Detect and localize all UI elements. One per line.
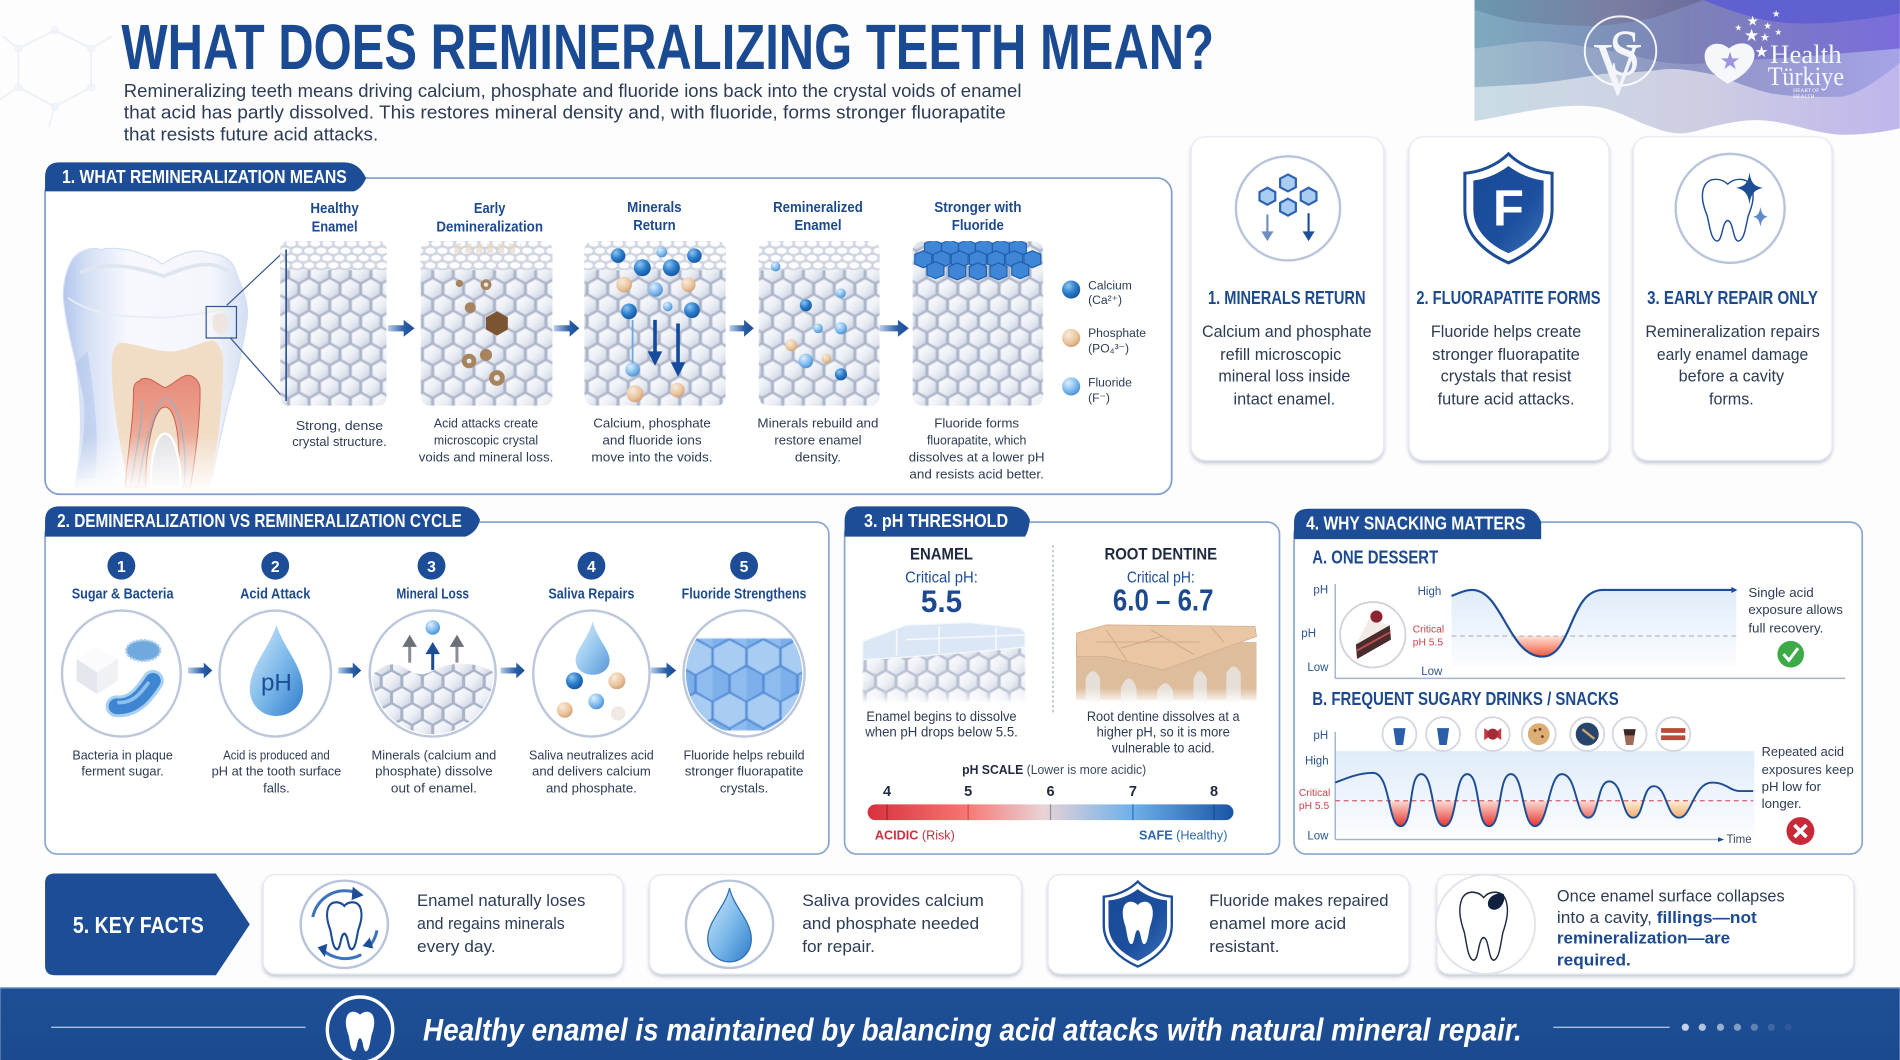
caption xyxy=(529,748,654,795)
caption xyxy=(212,748,341,795)
icon: crystals dissolving xyxy=(370,611,496,739)
logo: SV: S xyxy=(1609,18,1641,90)
step: remineralized enamel xyxy=(757,200,880,465)
text: Saliva provides calcium xyxy=(802,891,984,910)
heading: Return xyxy=(633,218,676,234)
chart B: frequent snacks: Low xyxy=(1307,831,1329,843)
step 4: saliva repairs xyxy=(529,552,654,795)
chart A: one dessert: pH 5.5 xyxy=(1413,638,1443,649)
caption: pH at the tooth surface xyxy=(212,763,341,778)
chart A: one dessert xyxy=(1302,584,1846,680)
caption: Minerals (calcium and xyxy=(372,748,496,763)
icon: tooth badge xyxy=(327,997,393,1060)
logo: Health Türkiye xyxy=(1705,9,1844,100)
icon: fluoride shield: F xyxy=(1493,179,1524,236)
legend: ions: Phosphate xyxy=(1088,326,1146,340)
caption: Saliva neutralizes acid xyxy=(529,748,654,763)
tab heading 4: 4. WHY SNACKING MATTERS xyxy=(1306,513,1525,533)
chart B: frequent snacks: pH xyxy=(1313,730,1328,742)
caption: Fluoride forms xyxy=(934,416,1019,431)
column: enamel xyxy=(863,545,1025,740)
intro paragraph: that acid has partly dissolved. This restores mineral density and, with fluoride, forms stronger fluorapatite xyxy=(124,103,1006,123)
pH scale: SAFE (Healthy) xyxy=(1139,828,1227,843)
logo: Health Türkiye: Health xyxy=(1770,39,1842,69)
heading xyxy=(310,201,359,235)
key facts banner xyxy=(45,873,250,975)
column: root dentine: higher pH, so it is more xyxy=(1097,724,1230,740)
tab heading 1 xyxy=(45,162,366,191)
body: refill microscopic xyxy=(1220,345,1342,364)
legend: ions: Calcium xyxy=(1088,279,1132,293)
chart A: one dessert: Critical xyxy=(1413,624,1444,635)
chart B: frequent snacks: High xyxy=(1305,755,1329,767)
icons: sugary snacks xyxy=(1382,717,1690,751)
text: enamel more acid xyxy=(1209,914,1346,933)
crystal block with ions xyxy=(584,241,726,406)
column: enamel: ENAMEL xyxy=(910,545,973,564)
logo: SV xyxy=(1585,16,1656,111)
column: root dentine: Critical pH: xyxy=(1127,570,1195,587)
arrow xyxy=(651,663,676,678)
pH scale: pH SCALE (Lower is more acidic) xyxy=(962,762,1146,777)
fact card 1 xyxy=(263,875,623,974)
logo: Health Türkiye: ★ xyxy=(1763,21,1772,32)
step 2: acid attack: 2 xyxy=(271,559,280,576)
card: minerals return xyxy=(1191,137,1384,460)
note: longer. xyxy=(1762,796,1802,811)
caption: out of enamel. xyxy=(391,780,477,795)
caption: and delivers calcium xyxy=(532,763,651,778)
caption: Acid is produced and xyxy=(223,748,330,763)
card: fluorapatite forms xyxy=(1409,137,1609,460)
icon: pH drop xyxy=(220,611,331,737)
body: mineral loss inside xyxy=(1218,367,1350,386)
heading xyxy=(773,200,863,234)
heading: Stronger with xyxy=(934,200,1021,216)
pH scale: ACIDIC (Risk) xyxy=(875,828,955,843)
arrow xyxy=(338,663,361,678)
legend: ions: (PO₄³⁻) xyxy=(1088,342,1129,356)
caption xyxy=(909,416,1044,482)
icon: check xyxy=(1777,641,1804,667)
chart A: one dessert: High xyxy=(1418,586,1441,598)
step 1: sugar and bacteria xyxy=(62,552,181,778)
arrow xyxy=(188,663,212,678)
step 5: fluoride strengthens xyxy=(682,552,806,795)
body: future acid attacks. xyxy=(1438,390,1574,409)
tooth cross-section illustration xyxy=(61,248,255,493)
heading: Enamel xyxy=(312,219,358,235)
chart A: one dessert: Low xyxy=(1307,662,1329,674)
caption: Bacteria in plaque xyxy=(72,748,173,763)
caption xyxy=(419,416,553,465)
caption: and resists acid better. xyxy=(909,467,1044,482)
title: WHAT DOES REMINERALIZING TEETH MEAN? xyxy=(121,11,1214,83)
logo: Health Türkiye: ★ xyxy=(1774,27,1782,37)
text: required. xyxy=(1557,951,1631,970)
icon: blue crystals xyxy=(683,611,805,737)
crystal block rebuilt xyxy=(759,241,880,406)
body: stronger fluorapatite xyxy=(1432,345,1580,364)
text: and phosphate needed xyxy=(802,914,979,933)
pH scale: 7 xyxy=(1129,784,1137,800)
intro paragraph xyxy=(124,81,1021,145)
chart A: one dessert: pH xyxy=(1301,628,1316,640)
caption: microscopic crystal xyxy=(434,433,538,448)
fact card 3 xyxy=(1048,875,1409,974)
note: pH low for xyxy=(1762,779,1822,794)
caption: restore enamel xyxy=(774,433,862,448)
step 3: mineral loss: Mineral Loss xyxy=(396,586,469,602)
heading: Enamel xyxy=(794,218,842,234)
caption xyxy=(591,416,713,465)
body: Fluoride helps create xyxy=(1431,322,1581,341)
tab heading 1: 1. WHAT REMINERALIZATION MEANS xyxy=(62,167,347,187)
pH scale: 6 xyxy=(1047,784,1055,800)
caption: and phosphate. xyxy=(546,780,637,795)
step: minerals return xyxy=(584,200,726,465)
header corner with logos xyxy=(1475,0,1900,135)
caption: voids and mineral loss. xyxy=(419,450,553,465)
body: early enamel damage xyxy=(1657,345,1808,364)
caption: crystal structure. xyxy=(292,434,387,449)
step 4: saliva repairs: 4 xyxy=(587,559,596,576)
chart A: one dessert: Low xyxy=(1421,666,1443,678)
heading: Early xyxy=(474,201,505,217)
text xyxy=(1557,886,1785,970)
caption xyxy=(292,418,387,449)
divider xyxy=(1052,545,1054,715)
tab heading 2 xyxy=(45,506,480,537)
fact card 2 xyxy=(650,875,1021,974)
tab heading 3: 3. pH THRESHOLD xyxy=(864,511,1008,531)
text xyxy=(1209,891,1389,956)
logo: Health Türkiye: HEALTH xyxy=(1793,94,1814,100)
legend: ions: Fluoride xyxy=(1088,375,1132,389)
logo: Health Türkiye: Türkiye xyxy=(1768,61,1844,91)
step 3: mineral loss: 3 xyxy=(427,559,436,576)
text xyxy=(802,891,984,956)
step 2: acid attack: Acid Attack xyxy=(240,586,311,602)
text: Enamel naturally loses xyxy=(417,891,585,910)
step 2: acid attack xyxy=(212,552,341,795)
note: Repeated acid xyxy=(1762,744,1844,759)
panel 2: cycle xyxy=(45,506,829,854)
logo: Health Türkiye: ★ xyxy=(1772,9,1781,20)
intro paragraph: that resists future acid attacks. xyxy=(124,125,378,145)
step 5: fluoride strengthens: 5 xyxy=(740,559,749,576)
text: every day. xyxy=(417,937,496,956)
legend: ions xyxy=(1062,279,1146,405)
text: and regains minerals xyxy=(417,914,565,933)
subheading A: A. ONE DESSERT xyxy=(1312,547,1438,567)
caption: phosphate) dissolve xyxy=(375,763,493,778)
icon: tooth with cycle arrows xyxy=(301,881,388,968)
body: crystals that resist xyxy=(1441,367,1572,386)
tab heading 3 xyxy=(845,506,1030,537)
crystal block with voids xyxy=(421,241,553,406)
icon: sparkling tooth xyxy=(1676,154,1785,263)
heading xyxy=(934,200,1021,234)
heading: 3. EARLY REPAIR ONLY xyxy=(1647,288,1818,308)
crystal block with fluoride cap xyxy=(912,240,1043,406)
heading: Minerals xyxy=(627,200,682,216)
step: early demineralization xyxy=(419,201,553,465)
column: enamel: Enamel begins to dissolve xyxy=(866,708,1017,724)
note: full recovery. xyxy=(1748,620,1823,635)
caption: fluorapatite, which xyxy=(927,433,1026,448)
background molecule decoration xyxy=(0,27,112,127)
icon: saliva drop and ions xyxy=(533,611,650,737)
column: root dentine: 6.0 – 6.7 xyxy=(1113,585,1213,618)
step: healthy enamel xyxy=(280,201,387,449)
arrow xyxy=(501,663,525,678)
caption: Fluoride helps rebuild xyxy=(683,748,805,763)
arrow xyxy=(880,320,909,337)
chart A: one dessert: pH xyxy=(1313,585,1328,597)
panel 3: pH threshold xyxy=(845,506,1280,854)
legend: ions: (Ca²⁺) xyxy=(1088,293,1122,307)
icon: cross xyxy=(1786,817,1814,845)
text: remineralization—are xyxy=(1557,929,1730,948)
chart B: frequent snacks: Critical xyxy=(1299,788,1330,799)
caption: and fluoride ions xyxy=(602,433,702,448)
logo: Health Türkiye: ★ xyxy=(1719,48,1741,75)
body: before a cavity xyxy=(1679,367,1785,386)
heading xyxy=(627,200,682,234)
chart B: frequent snacks: pH 5.5 xyxy=(1299,801,1329,812)
caption xyxy=(72,748,173,778)
logo: Health Türkiye: HEART OF xyxy=(1793,88,1819,94)
note: exposures keep xyxy=(1762,762,1854,777)
logo: Health Türkiye: ★ xyxy=(1734,22,1742,32)
heading: Healthy xyxy=(310,201,359,217)
caption: Strong, dense xyxy=(296,418,383,433)
panel 4: why snacking matters xyxy=(1294,509,1862,854)
arrow xyxy=(554,320,579,337)
text xyxy=(417,891,585,956)
heading: Fluoride xyxy=(952,218,1004,234)
column: root dentine: vulnerable to acid. xyxy=(1112,739,1215,755)
note: exposure allows xyxy=(1748,602,1843,617)
tab heading 4 xyxy=(1294,509,1541,539)
logo: Health Türkiye: ★ xyxy=(1747,13,1759,28)
intro paragraph: Remineralizing teeth means driving calcium, phosphate and fluoride ions back into the crystal voids of enamel xyxy=(124,81,1021,101)
icon: tooth with cavity xyxy=(1436,875,1535,974)
dentine slab image xyxy=(1076,625,1256,704)
pH scale: 8 xyxy=(1210,784,1218,800)
text: for repair. xyxy=(802,937,875,956)
pH scale: 4 xyxy=(883,784,891,800)
column: enamel: Critical pH: xyxy=(905,570,978,587)
panel 1: what remineralization means xyxy=(45,162,1172,494)
column: root dentine xyxy=(1076,545,1256,755)
body xyxy=(1431,322,1581,409)
step 1: sugar and bacteria: 1 xyxy=(117,559,126,576)
caption xyxy=(757,416,879,465)
icon: cake xyxy=(1340,602,1405,667)
enamel slab image xyxy=(863,623,1025,704)
logo: SV: V xyxy=(1593,28,1642,111)
card: early repair only xyxy=(1633,137,1832,460)
step 1: sugar and bacteria: Sugar & Bacteria xyxy=(72,586,174,602)
arrow xyxy=(730,320,754,337)
note xyxy=(1762,744,1854,811)
logo: Health Türkiye: ★ xyxy=(1744,26,1759,45)
caption xyxy=(683,748,805,795)
heading: Remineralized xyxy=(773,200,863,216)
caption: ferment sugar. xyxy=(81,763,164,778)
heading: Demineralization xyxy=(436,219,543,235)
logo: Health Türkiye: ★ xyxy=(1755,44,1769,61)
caption: stronger fluorapatite xyxy=(685,763,803,778)
logo: Health Türkiye: ★ xyxy=(1760,32,1770,44)
heading: 1. MINERALS RETURN xyxy=(1208,288,1366,308)
text: Fluoride makes repaired xyxy=(1209,891,1389,910)
icon: sugar cube and bacteria xyxy=(62,611,181,737)
step 4: saliva repairs: Saliva Repairs xyxy=(548,586,634,602)
heading: 2. FLUORAPATITE FORMS xyxy=(1416,288,1601,308)
caption: density. xyxy=(795,450,841,465)
chart B: frequent snacks xyxy=(1299,717,1854,846)
note: Single acid xyxy=(1748,585,1814,600)
caption: crystals. xyxy=(720,780,768,795)
icon: shield with tooth xyxy=(1104,882,1172,967)
key facts banner: 5. KEY FACTS xyxy=(73,912,204,938)
body xyxy=(1202,322,1372,409)
caption: falls. xyxy=(263,780,290,795)
text: Once enamel surface collapses xyxy=(1557,886,1785,905)
body: Calcium and phosphate xyxy=(1202,322,1372,341)
caption: Acid attacks create xyxy=(434,416,538,431)
note xyxy=(1748,585,1843,635)
step 5: fluoride strengthens: Fluoride Strengthens xyxy=(682,586,806,602)
footer banner xyxy=(0,987,1900,1060)
column: enamel: when pH drops below 5.5. xyxy=(864,724,1018,740)
body xyxy=(1645,322,1820,409)
column: root dentine: Root dentine dissolves at a xyxy=(1087,708,1240,724)
text: into a cavity, fillings—not xyxy=(1557,908,1757,927)
body: intact enamel. xyxy=(1233,390,1335,409)
caption: Minerals rebuild and xyxy=(757,416,879,431)
caption: dissolves at a lower pH xyxy=(909,450,1044,465)
icon: pH drop: pH xyxy=(261,670,292,697)
heading xyxy=(436,201,543,235)
text: resistant. xyxy=(1209,937,1280,956)
subheading B: B. FREQUENT SUGARY DRINKS / SNACKS xyxy=(1312,689,1619,709)
crystal block xyxy=(280,241,387,406)
zoom lines xyxy=(227,250,286,401)
tagline: Healthy enamel is maintained by balancing acid attacks with natural mineral repair. xyxy=(423,1012,1522,1048)
arrow xyxy=(388,320,415,337)
step: stronger with fluoride xyxy=(909,200,1044,482)
step 3: mineral loss xyxy=(370,552,496,795)
body: forms. xyxy=(1709,390,1754,409)
caption: move into the voids. xyxy=(591,450,713,465)
icon: hexagons with arrows xyxy=(1236,156,1340,260)
caption: Calcium, phosphate xyxy=(593,416,711,431)
chart B: frequent snacks: Time xyxy=(1727,834,1752,846)
body: Remineralization repairs xyxy=(1645,322,1820,341)
legend: ions: (F⁻) xyxy=(1088,391,1110,405)
icon: fluoride shield xyxy=(1465,154,1552,263)
icon: saliva drop xyxy=(686,881,773,968)
column: enamel: 5.5 xyxy=(921,583,962,619)
caption xyxy=(372,748,496,795)
pH scale: 5 xyxy=(964,784,972,800)
pH scale xyxy=(868,762,1233,843)
column: root dentine: ROOT DENTINE xyxy=(1104,545,1217,564)
fact card 4 xyxy=(1436,875,1854,974)
tab heading 2: 2. DEMINERALIZATION VS REMINERALIZATION CYCLE xyxy=(57,511,462,531)
